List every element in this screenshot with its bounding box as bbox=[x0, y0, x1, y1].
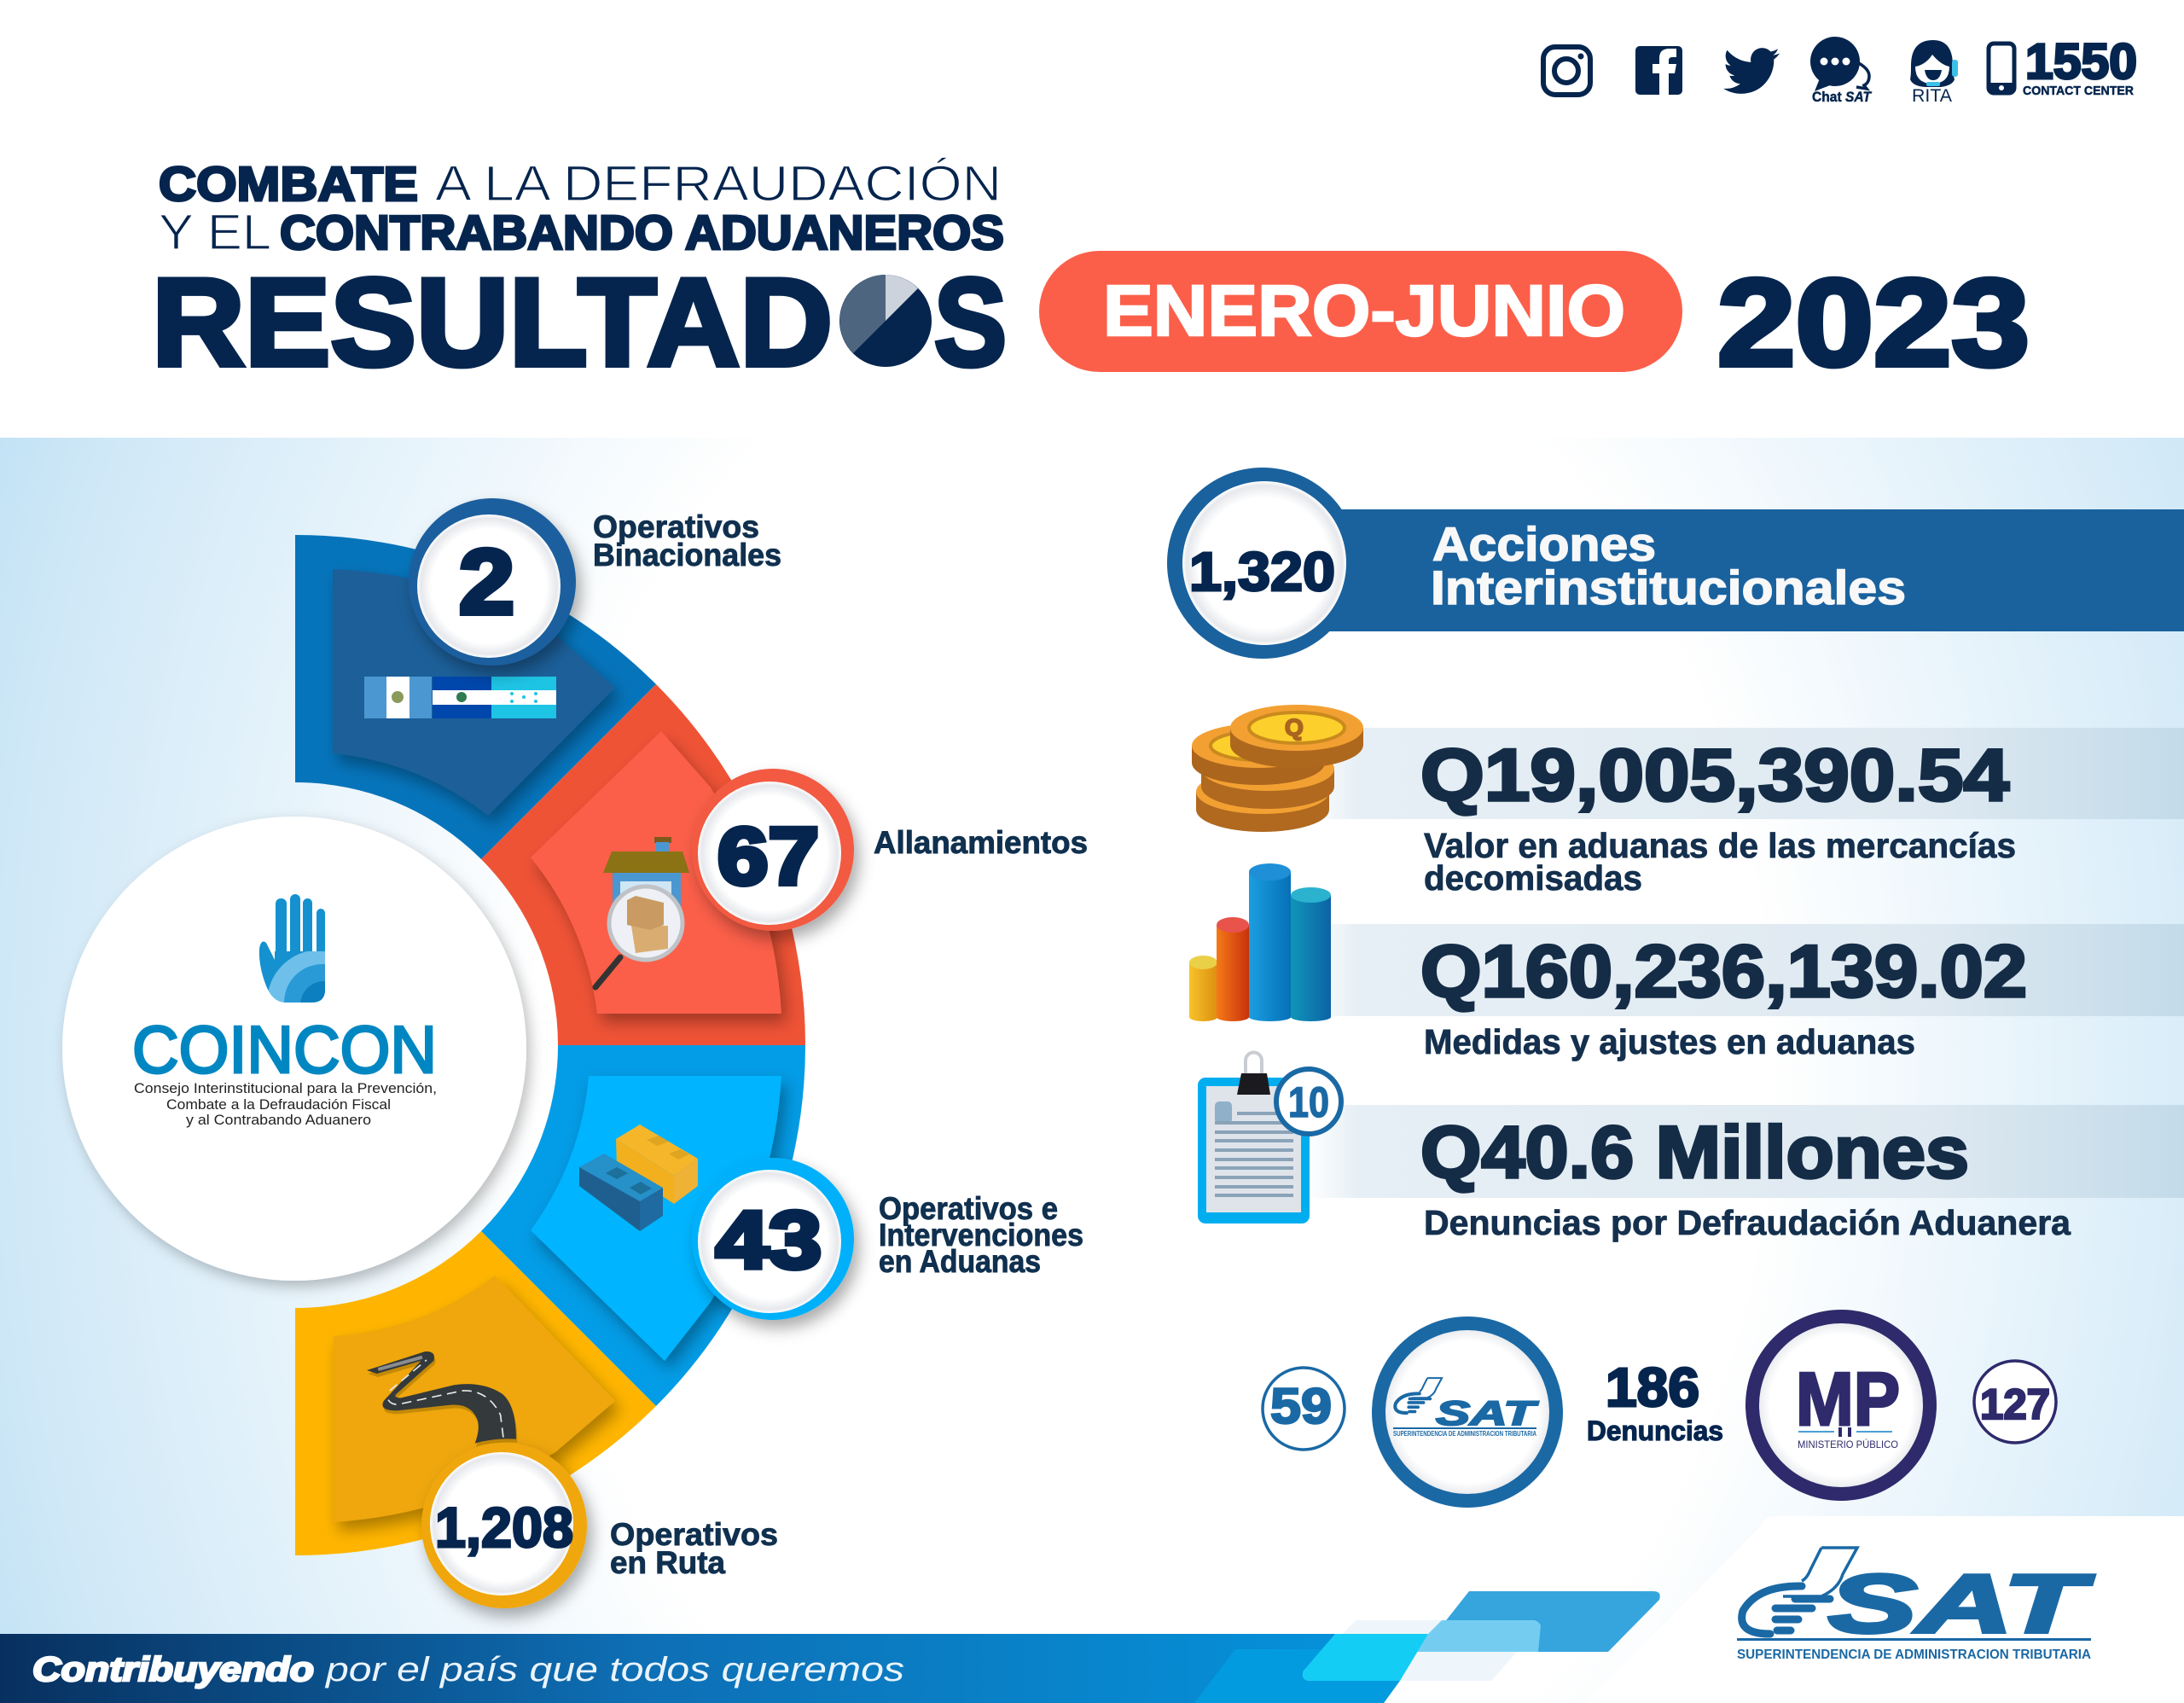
label: en Aduanas bbox=[879, 1244, 1041, 1279]
badge: 127 bbox=[1974, 1361, 2056, 1443]
COINCON central circle bbox=[62, 817, 526, 1281]
logo: MP circle: MP bbox=[1796, 1357, 1900, 1441]
badge: 67: 67 bbox=[717, 811, 819, 902]
header background bbox=[0, 0, 2184, 438]
label bbox=[610, 1517, 778, 1580]
logo: SAT large bbox=[1737, 1548, 2094, 1662]
label bbox=[593, 509, 781, 573]
heading line 2: Y EL bbox=[159, 205, 271, 260]
logo: SAT circle: SUPERINTENDENCIA DE ADMINISTRACION TRIBUTARIA bbox=[1393, 1430, 1536, 1438]
total denuncias bbox=[1587, 1357, 1723, 1446]
value: Q40.6 Millones bbox=[1420, 1112, 1969, 1194]
label: Allanamientos bbox=[874, 825, 1088, 860]
label: Operativos bbox=[593, 509, 759, 544]
segment: allanamientos bbox=[481, 684, 1088, 1045]
label: Operativos bbox=[610, 1517, 778, 1552]
icon: flags bbox=[364, 677, 556, 718]
date pill bbox=[1039, 251, 1682, 372]
icon: facebook bbox=[1635, 46, 1682, 95]
heading line 1 bbox=[159, 156, 1002, 212]
icon: coins bbox=[1192, 705, 1363, 832]
description: Valor en aduanas de las mercancías bbox=[1424, 826, 2016, 865]
icon: winding road bbox=[367, 1351, 517, 1447]
badge: 2: 2 bbox=[459, 530, 514, 633]
badge: 1,208: 1,208 bbox=[435, 1496, 573, 1559]
year: 2023 bbox=[1717, 253, 2030, 392]
panel: medidas y ajustes bbox=[1189, 863, 2184, 1061]
badge: 127: 127 bbox=[1980, 1380, 2050, 1428]
badge: 10: 10 bbox=[1288, 1078, 1329, 1126]
heading: resultados with pie chart: RESULTAD bbox=[152, 253, 833, 392]
title bbox=[152, 156, 2030, 392]
total denuncias: Denuncias bbox=[1587, 1415, 1723, 1446]
label: en Ruta bbox=[610, 1545, 725, 1580]
logo: MP circle bbox=[1752, 1316, 1930, 1494]
social and contact icons bbox=[1543, 34, 2137, 106]
icon: chat SAT: Chat SAT bbox=[1812, 89, 1872, 105]
icon: phone and contact center bbox=[1989, 34, 2137, 98]
footer pale parallelogram bbox=[1303, 1620, 1608, 1681]
logo: SAT circle bbox=[1379, 1323, 1556, 1501]
logo description: Combate a la Defraudación Fiscal bbox=[166, 1096, 391, 1113]
footer blue parallelogram bbox=[1421, 1591, 1660, 1652]
icon: thumb and document small bbox=[1395, 1378, 1442, 1413]
badge: 10 bbox=[1276, 1069, 1341, 1134]
logo: SAT circle: SAT bbox=[1436, 1395, 1539, 1433]
heading line 2: CONTRABANDO ADUANEROS bbox=[280, 206, 1004, 260]
slogan: por el país que todos queremos bbox=[325, 1651, 904, 1688]
panel: acciones interinstitucionales bbox=[1167, 468, 2184, 659]
segment: operativos e intervenciones en aduanas bbox=[481, 1045, 1083, 1406]
segment: operativos en ruta bbox=[295, 1231, 778, 1608]
value: Q160,236,139.02 bbox=[1420, 931, 2027, 1013]
icon: house and magnifier bbox=[595, 837, 689, 987]
banner text: Acciones bbox=[1432, 517, 1656, 571]
label bbox=[879, 1191, 1083, 1279]
badge: 1,320 bbox=[1167, 468, 1358, 659]
panel: denuncias por institución bbox=[1263, 1316, 2056, 1501]
description: decomisadas bbox=[1424, 858, 1642, 898]
footer bar bbox=[0, 1591, 1660, 1703]
icon: instagram bbox=[1543, 47, 1590, 95]
icon: chat SAT bbox=[1810, 37, 1872, 105]
logo description: y al Contrabando Aduanero bbox=[186, 1112, 371, 1128]
icon: thumb and document bbox=[1742, 1548, 1857, 1634]
logo wordmark: COINCON bbox=[132, 1012, 437, 1087]
description: Denuncias por Defraudación Aduanera bbox=[1424, 1203, 2071, 1242]
total denuncias: 186 bbox=[1606, 1357, 1699, 1418]
badge: 67 bbox=[692, 769, 854, 931]
icon: RITA assistant bbox=[1910, 40, 1958, 106]
description: Medidas y ajustes en aduanas bbox=[1424, 1022, 1915, 1061]
icon: phone and contact center: CONTACT CENTER bbox=[2023, 84, 2134, 98]
icon: shipping containers bbox=[579, 1125, 698, 1231]
slogan: Contribuyendo bbox=[32, 1651, 314, 1688]
panel: valor en aduanas bbox=[1192, 705, 2184, 898]
footer white corner panel bbox=[1586, 1516, 2184, 1703]
icon: phone and contact center: 1550 bbox=[2025, 34, 2137, 90]
icon: raised hand bbox=[259, 894, 325, 1003]
banner text: Interinstitucionales bbox=[1431, 561, 1906, 614]
icon: cylinder bar chart bbox=[1189, 863, 1331, 1021]
semicircular results chart bbox=[62, 498, 1088, 1608]
badge: 2 bbox=[409, 498, 576, 666]
heading: resultados with pie chart: S bbox=[934, 253, 1007, 392]
panel: denuncias por defraudación bbox=[1198, 1053, 2184, 1242]
badge: 43 bbox=[692, 1158, 854, 1320]
badge: 1,320: 1,320 bbox=[1189, 541, 1335, 602]
segment: operativos binacionales bbox=[295, 498, 781, 859]
icon: clipboard bbox=[1198, 1053, 1341, 1223]
icon: pie chart letter O bbox=[839, 275, 932, 367]
icon: coins: Q bbox=[1285, 714, 1304, 741]
logo: MP circle: MINISTERIO PÚBLICO bbox=[1798, 1438, 1898, 1450]
banner text bbox=[1431, 517, 1906, 614]
label: Binacionales bbox=[593, 538, 781, 573]
wordmark: SAT bbox=[1828, 1557, 2094, 1650]
icon: twitter bbox=[1723, 48, 1780, 94]
heading line 1: A LA DEFRAUDACIÓN bbox=[435, 156, 1002, 212]
heading line 1: COMBATE bbox=[159, 157, 418, 212]
icon: RITA assistant: RITA bbox=[1912, 86, 1952, 106]
label: Operativos e bbox=[879, 1191, 1058, 1226]
logo description bbox=[134, 1080, 437, 1128]
badge: 59 bbox=[1263, 1368, 1345, 1450]
slogan bbox=[32, 1651, 904, 1688]
logo description: Consejo Interinstitucional para la Prevención, bbox=[134, 1080, 437, 1096]
wordmark subtitle: SUPERINTENDENCIA DE ADMINISTRACION TRIBUTARIA bbox=[1737, 1648, 2091, 1662]
description bbox=[1424, 826, 2016, 898]
banner bbox=[1280, 509, 2184, 631]
main panel background bbox=[0, 438, 2184, 1703]
badge: 1,208 bbox=[421, 1443, 587, 1608]
date pill: ENERO-JUNIO bbox=[1103, 270, 1625, 351]
value: Q19,005,390.54 bbox=[1420, 735, 2009, 817]
label: Intervenciones bbox=[879, 1218, 1083, 1253]
badge: 43: 43 bbox=[716, 1195, 822, 1286]
badge: 59: 59 bbox=[1270, 1379, 1332, 1434]
